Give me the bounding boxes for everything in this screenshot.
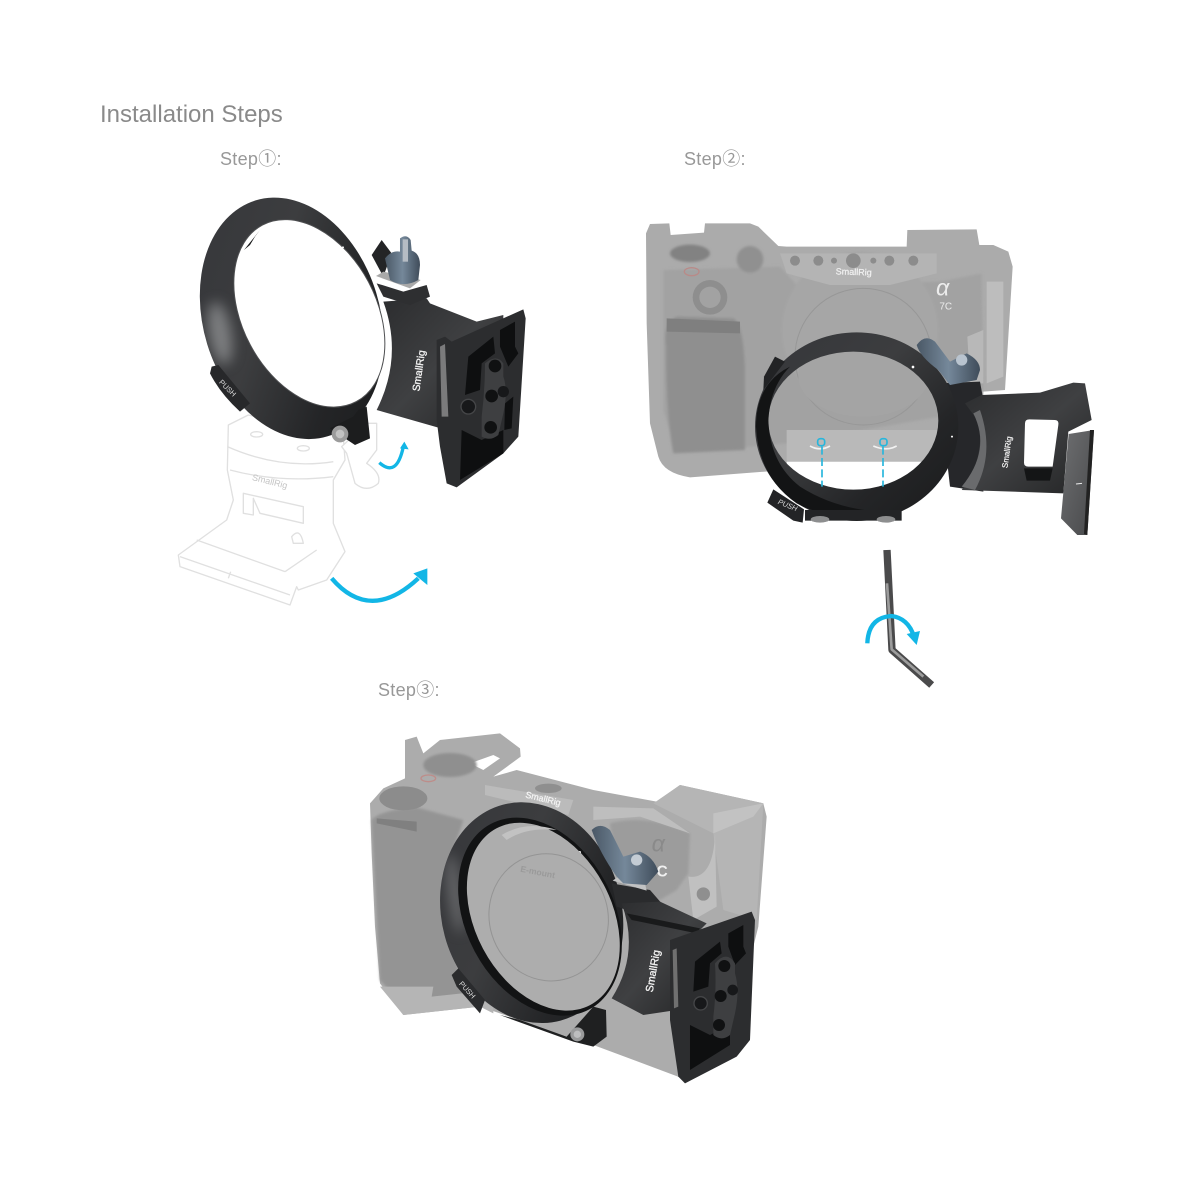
ghost mount outline: SmallRig [251,472,288,491]
step 3 illustration [370,733,767,1083]
body cap: E-mount [520,864,556,880]
turning arrow [867,616,920,645]
mounting plate [437,309,526,487]
grey camera with cage [370,733,767,1077]
ring [440,802,624,1023]
clamp block and screw [330,407,370,445]
clamp block and screw [500,1007,607,1047]
grey camera with cage [646,223,1013,477]
locking knob [592,826,662,910]
bracket connector behind ring [938,382,983,492]
grey camera with cage: C [657,864,668,881]
SmallRig logo on cage: SmallRig [525,790,562,808]
push button and base screws: PUSH [777,497,799,513]
push button [210,365,250,412]
step 2 illustration [646,223,1094,685]
locking knob [372,236,430,305]
title: Installation Steps [100,101,283,128]
step 3 label: Step③: [378,680,440,700]
quick release bracket body [377,298,503,430]
bracket body [612,902,707,1015]
alpha 7C mark [936,274,952,312]
grey camera with cage: α [652,831,666,857]
folded bracket: SmallRig [1000,436,1014,469]
push button and base screws [767,489,902,523]
locking knob [917,338,980,385]
alpha 7C mark: α [936,274,950,300]
SmallRig logo on cage: SmallRig [836,266,872,278]
step 1 label: Step①: [220,149,282,169]
ring [755,332,958,521]
step 2 label: Step②: [684,149,746,169]
ring wall and face [200,198,386,440]
small rotation arrow [379,442,409,468]
push button: PUSH [217,378,238,398]
SmallRig logo on bracket: SmallRig [411,349,428,392]
large rotation arrow [332,568,427,601]
bracket body: SmallRig [644,949,663,993]
push button [452,968,485,1013]
step 1 illustration [171,175,526,605]
hex key [887,550,932,685]
alpha 7C mark: 7C [939,301,952,312]
body cap [436,796,651,1037]
folded bracket [962,383,1094,535]
cyan guide lines [818,439,887,487]
ghost mount outline [178,415,379,605]
mounting plate [670,912,755,1083]
push button: PUSH [457,979,478,1000]
